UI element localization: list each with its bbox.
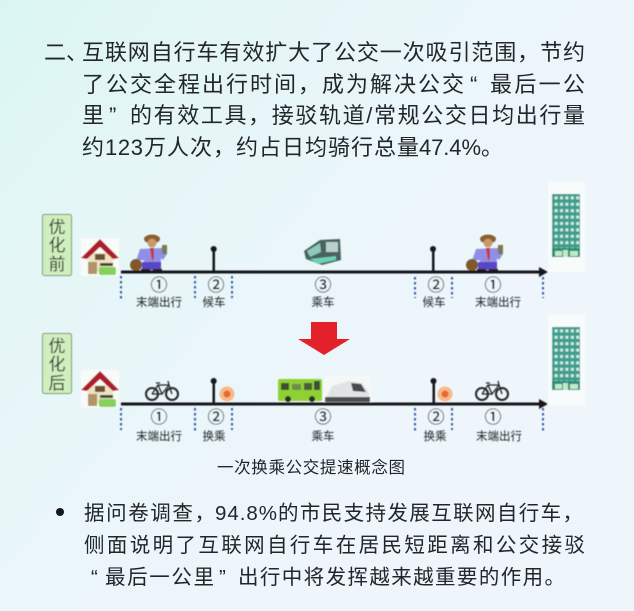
segment labels: 换乘 (202, 429, 226, 443)
heading paragraph (44, 40, 585, 160)
icon: white coach (324, 376, 371, 402)
badge: before: 前 (48, 255, 66, 274)
segment labels: ② (208, 408, 224, 427)
transfer stop right (430, 378, 452, 403)
segment labels: 换乘 (424, 429, 447, 443)
diagram: after optimization (42, 315, 585, 443)
segment labels: 乘车 (312, 295, 334, 309)
heading paragraph: 万人次，约占日均骑行总量 (144, 135, 419, 160)
segment labels: ③ (314, 408, 332, 427)
icon: bus (304, 239, 341, 265)
bullet point text: 最后一公里 (105, 566, 214, 589)
heading paragraph: 约 (82, 135, 104, 160)
segment separators (121, 408, 543, 433)
bullet point text (56, 502, 585, 589)
timeline arrow (121, 399, 548, 409)
icon: bicycle left (146, 381, 178, 400)
badge: after: 后 (48, 374, 66, 393)
segment labels: ② (428, 276, 444, 295)
segment labels: 末端出行 (136, 429, 182, 443)
badge: after: 优 (48, 337, 66, 356)
icon: home (81, 370, 119, 408)
bullet point text: 94.8% (215, 502, 277, 525)
badge: after: 化 (48, 355, 66, 374)
heading paragraph: 47.4% (419, 135, 481, 160)
diagram caption: 一次换乘公交提速概念图 (217, 457, 405, 477)
heading paragraph: 123 (105, 135, 143, 160)
heading paragraph: ” (109, 103, 116, 128)
timeline arrow (121, 267, 548, 277)
segment labels: 末端出行 (476, 429, 522, 443)
badge: before (42, 214, 72, 276)
segment labels: ③ (314, 276, 332, 295)
badge: before: 优 (48, 218, 66, 237)
wait stop marker left (211, 246, 217, 271)
heading paragraph: “ (470, 72, 477, 97)
icon: destination tower (548, 182, 585, 272)
heading paragraph: 了公交全程出行时间，成为解决公交 (82, 72, 464, 97)
diagram: before optimization (42, 182, 585, 309)
icon: commuter right (466, 234, 503, 272)
segment separators (121, 276, 543, 299)
segment labels: 末端出行 (136, 295, 182, 309)
segment labels: ② (208, 276, 224, 295)
bullet point text: ” (219, 566, 226, 589)
heading paragraph: 的有效工具，接驳轨道/常规公交日均出行量 (130, 103, 585, 128)
bullet point text: 的市民支持发展互联网自行车， (278, 502, 583, 525)
icon: home (81, 238, 119, 276)
bullet dot (56, 508, 64, 516)
icon: bicycle right (476, 381, 508, 400)
bullet point text: 据问卷调查， (84, 502, 215, 525)
segment labels: ① (150, 276, 168, 295)
badge: after (42, 334, 72, 394)
segment labels: 候车 (202, 295, 226, 309)
bullet point text: “ (91, 566, 98, 589)
heading paragraph: 里 (82, 103, 104, 128)
heading paragraph: 。 (481, 135, 503, 160)
segment labels (136, 408, 522, 443)
segment labels: ① (150, 408, 168, 427)
segment labels: 末端出行 (475, 295, 521, 309)
badge: before: 化 (48, 236, 66, 255)
segment labels: 候车 (422, 295, 446, 309)
heading paragraph: 互联网自行车有效扩大了公交一次吸引范围，节约 (82, 40, 585, 65)
wait stop marker right (430, 246, 436, 271)
bullet point text: 出行中将发挥越来越重要的作用。 (238, 566, 565, 589)
segment labels: 乘车 (312, 429, 334, 443)
heading paragraph: 二、 (44, 40, 88, 65)
icon: green bus (278, 379, 322, 402)
segment labels: ① (484, 408, 502, 427)
icon: red down arrow (298, 322, 350, 355)
segment labels: ② (428, 408, 444, 427)
segment labels: ① (484, 276, 502, 295)
transfer stop left (211, 378, 234, 403)
heading paragraph: 最后一公 (490, 72, 585, 97)
segment labels (136, 276, 521, 309)
icon: commuter (130, 234, 167, 272)
bullet point text: 侧面说明了互联网自行车在居民短距离和公交接驳 (84, 534, 585, 557)
icon: destination tower (548, 315, 585, 405)
